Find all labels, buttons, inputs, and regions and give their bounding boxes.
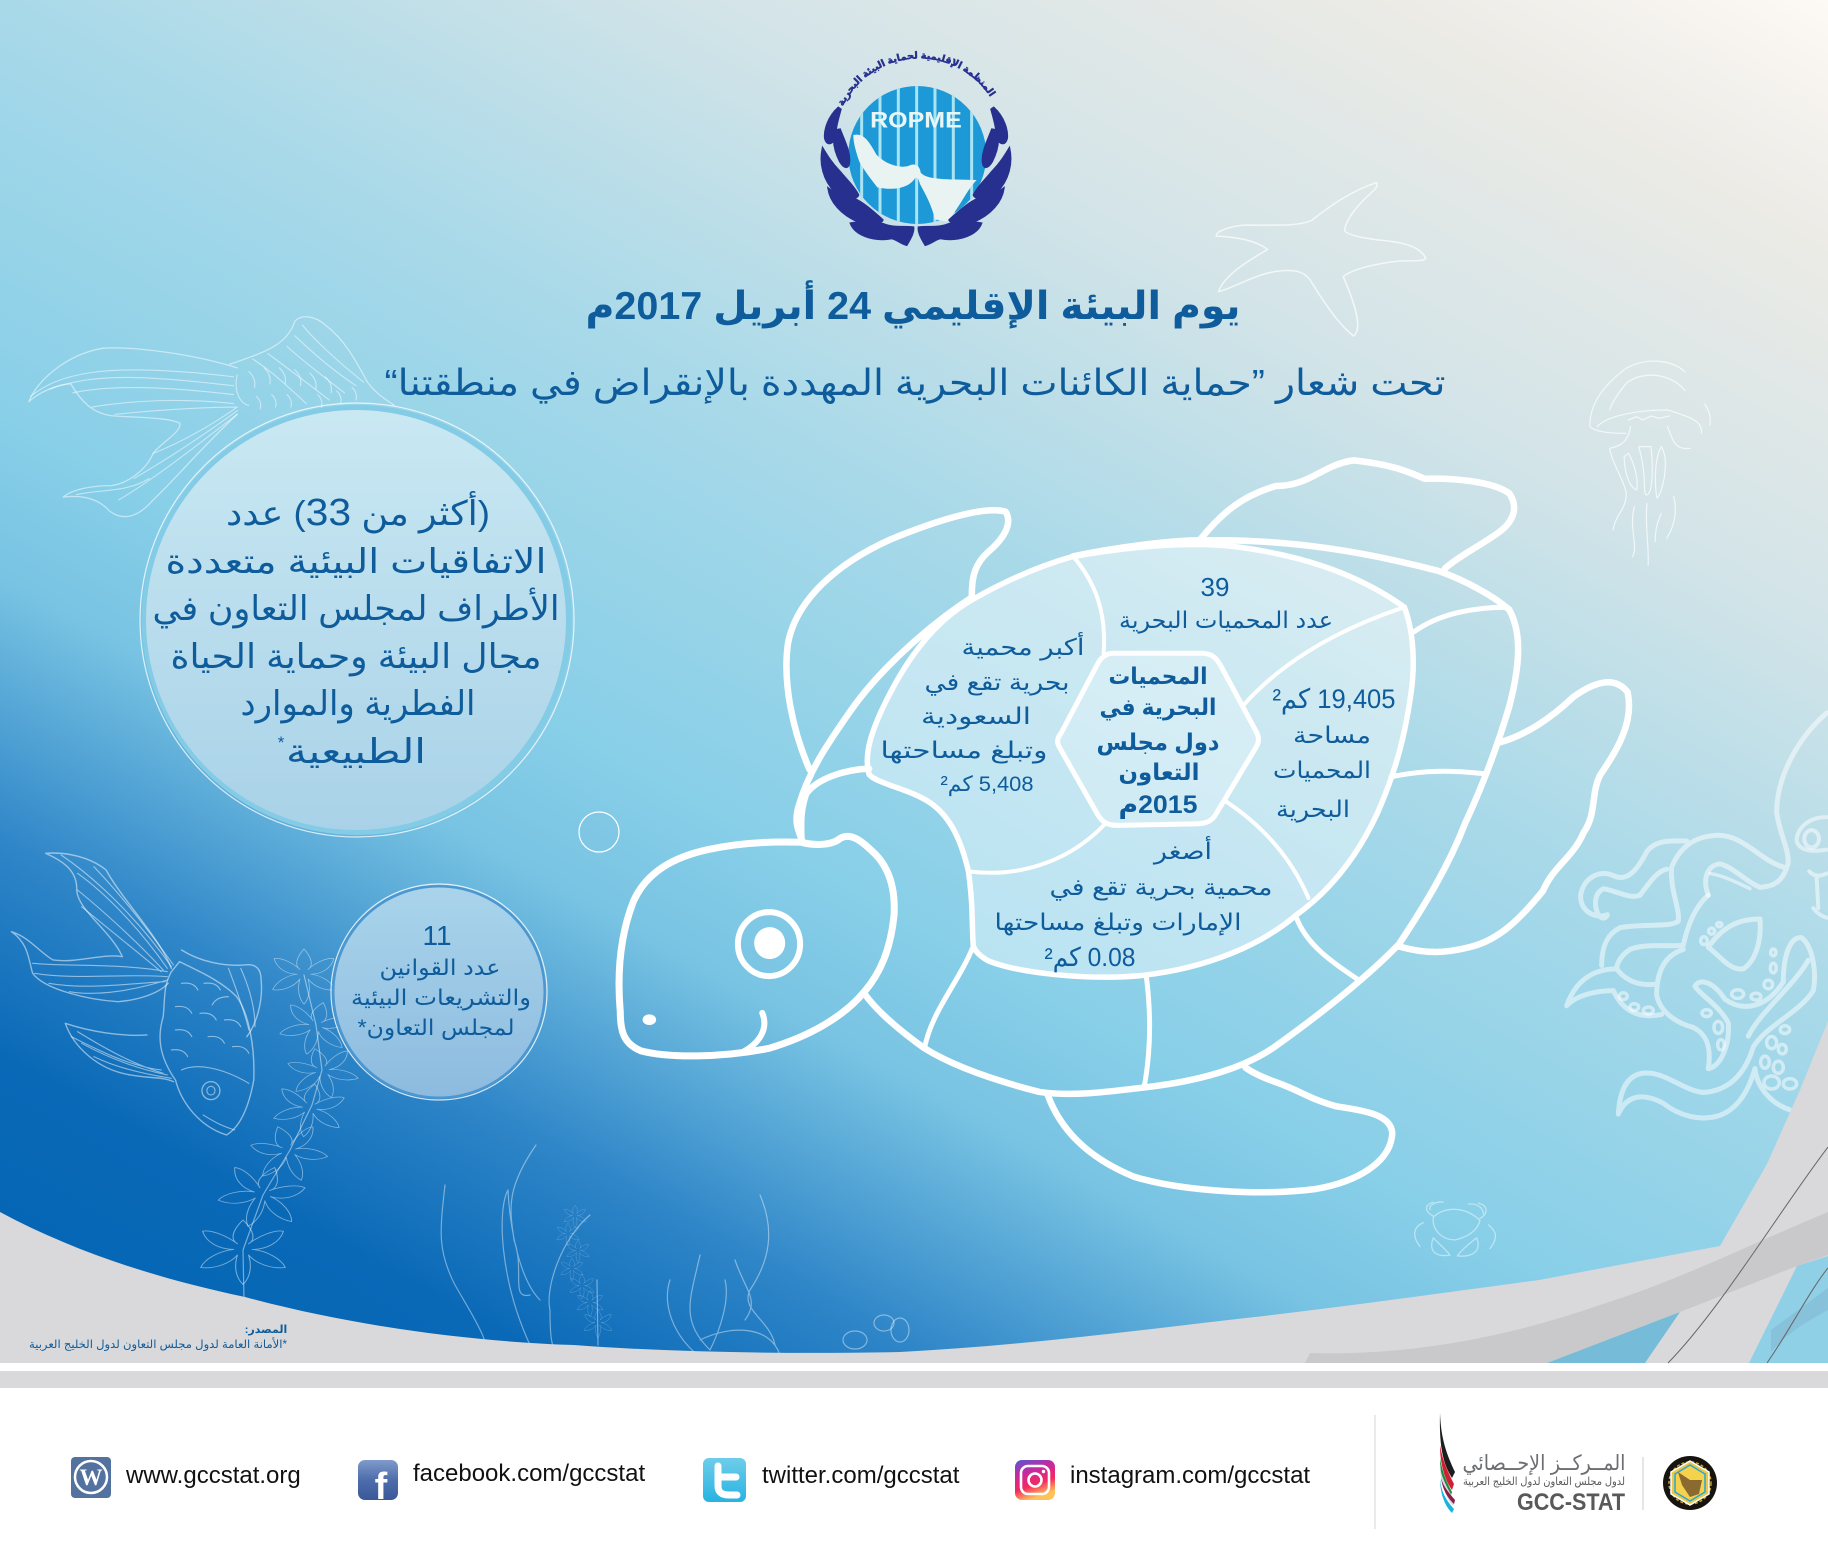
turtle: front flipper bbox=[786, 510, 1008, 770]
source note: *الأمانة العامة لدول مجلس التعاون لدول الخليج العربية bbox=[29, 1337, 288, 1352]
decoration: bottom-left fish bbox=[11, 853, 262, 1135]
turtle text: hexagon heading: 2015م bbox=[1118, 791, 1198, 819]
icon: wordpress bbox=[71, 1457, 111, 1498]
social: instagram: instagram.com/gccstat bbox=[1070, 1462, 1310, 1489]
logo ribbons bbox=[1440, 1413, 1455, 1513]
logo: GCC-STAT: لدول مجلس التعاون لدول الخليج العربية bbox=[1463, 1476, 1625, 1488]
turtle: smile bbox=[743, 1013, 764, 1052]
social: facebook bbox=[358, 1460, 645, 1508]
source note: المصدر: bbox=[245, 1324, 287, 1336]
turtle text: largest reserve bbox=[880, 632, 1084, 797]
turtle text: reserve area bbox=[1272, 684, 1396, 823]
panel: large circle, agreements: * bbox=[278, 733, 285, 752]
social: twitter: twitter.com/gccstat bbox=[762, 1462, 960, 1489]
icon: facebook: f bbox=[375, 1466, 388, 1508]
logo: ROPME emblem: ROPME bbox=[870, 107, 962, 132]
panel: large circle, agreements: الأطراف لمجلس التعاون في bbox=[152, 587, 560, 629]
logo: GCC-STAT: المــركــز الإحــصائي bbox=[1462, 1452, 1626, 1475]
turtle text: hexagon heading: دول مجلس bbox=[1096, 729, 1220, 756]
panel: small circle, laws: عدد القوانين bbox=[380, 955, 500, 980]
icon: wordpress: W bbox=[80, 1465, 102, 1490]
panel: small circle, laws bbox=[331, 884, 547, 1100]
logo: GCC-STAT bbox=[1440, 1413, 1626, 1516]
turtle: shell and flippers line art bbox=[619, 460, 1629, 1192]
turtle text: largest reserve: بحرية تقع في bbox=[924, 669, 1070, 696]
turtle: shell dividers bbox=[968, 556, 1404, 898]
icon: twitter bbox=[703, 1458, 746, 1502]
decoration: bottom seaweed bbox=[441, 1145, 909, 1380]
social: website: www.gccstat.org bbox=[125, 1462, 301, 1489]
title: يوم البيئة الإقليمي 24 أبريل 2017م bbox=[586, 280, 1240, 329]
turtle text: largest reserve: 5,408 كم² bbox=[940, 773, 1034, 797]
decoration: crab bbox=[1415, 1202, 1495, 1256]
turtle text: smallest reserve: محمية بحرية تقع في bbox=[1050, 874, 1272, 901]
turtle text: reserve area: مساحة bbox=[1293, 722, 1371, 748]
panel: large circle, agreements: الاتفاقيات البيئية متعددة bbox=[166, 543, 546, 581]
subtitle: تحت شعار ”حماية الكائنات البحرية المهددة بالإنقراض في منطقتنا“ bbox=[384, 362, 1446, 404]
social: twitter bbox=[703, 1458, 960, 1502]
social: instagram bbox=[1015, 1460, 1310, 1500]
icon: instagram bbox=[1015, 1460, 1055, 1500]
decoration: bubble bbox=[579, 812, 619, 852]
turtle text: number of reserves: عدد المحميات البحرية bbox=[1119, 607, 1333, 634]
turtle text: reserve area: المحميات bbox=[1273, 757, 1371, 783]
turtle text: largest reserve: وتبلغ مساحتها bbox=[880, 737, 1048, 764]
decoration: top-left fish bbox=[29, 317, 394, 517]
decoration: plant stem with leaves bbox=[201, 949, 363, 1300]
panel: large circle, agreements: (أكثر من 33) عدد bbox=[226, 491, 490, 534]
turtle text: smallest reserve: أصغر bbox=[1153, 836, 1212, 865]
panel: small circle, laws: لمجلس التعاون* bbox=[358, 1015, 514, 1041]
turtle text: largest reserve: السعودية bbox=[921, 703, 1031, 730]
turtle text: smallest reserve bbox=[994, 836, 1272, 973]
turtle: head bbox=[619, 836, 894, 1056]
turtle: neck bbox=[801, 769, 869, 842]
turtle text: hexagon heading bbox=[1096, 663, 1220, 819]
icon: facebook bbox=[358, 1460, 398, 1508]
turtle text: hexagon heading: التعاون bbox=[1118, 759, 1200, 786]
decoration: octopus bbox=[1567, 713, 1827, 1118]
turtle text: hexagon heading: البحرية في bbox=[1100, 694, 1216, 721]
decoration: jellyfish bbox=[1590, 361, 1710, 565]
logo: GCC emblem bbox=[1663, 1456, 1717, 1510]
panel: large circle, agreements: مجال البيئة وحماية الحياة bbox=[170, 638, 542, 677]
footer band bbox=[0, 1371, 1828, 1388]
turtle: lower flipper bbox=[1048, 1068, 1392, 1192]
social: website bbox=[71, 1457, 301, 1498]
panel: grey swoosh footer of hero bbox=[0, 1021, 1828, 1363]
social: facebook: facebook.com/gccstat bbox=[413, 1460, 645, 1487]
panel: small circle, laws: 11 bbox=[422, 920, 452, 951]
turtle: upper rear flipper bbox=[1200, 460, 1514, 568]
turtle illustration bbox=[0, 460, 1828, 1529]
turtle text: largest reserve: أكبر محمية bbox=[962, 632, 1084, 661]
turtle: eye ring bbox=[738, 912, 800, 976]
panel: small circle, laws: والتشريعات البيئية bbox=[351, 985, 531, 1010]
turtle: eye pupil bbox=[754, 927, 785, 959]
turtle text: smallest reserve: الإمارات وتبلغ مساحتها bbox=[994, 909, 1242, 936]
logo: GCC-STAT: GCC-STAT bbox=[1517, 1489, 1625, 1516]
panel: large circle, agreements: الفطرية والموارد bbox=[240, 685, 476, 724]
turtle text: hexagon heading: المحميات bbox=[1108, 663, 1208, 689]
turtle text: number of reserves bbox=[1119, 572, 1333, 634]
turtle text: reserve area: 19,405 كم² bbox=[1272, 684, 1396, 715]
logo: ROPME emblem: المنظمة الإقليمية لحماية البيئة البحرية bbox=[839, 50, 996, 106]
panel: large circle, agreements: الطبيعية bbox=[286, 733, 426, 771]
turtle text: reserve area: البحرية bbox=[1276, 796, 1350, 823]
turtle text: smallest reserve: 0.08 كم² bbox=[1044, 942, 1136, 973]
logo: ROPME emblem bbox=[820, 50, 1012, 246]
decoration: starfish bbox=[1216, 183, 1426, 336]
panel: large circle, agreements bbox=[140, 403, 574, 837]
turtle: right flipper bbox=[1399, 682, 1629, 952]
source note bbox=[29, 1324, 288, 1352]
turtle text: number of reserves: 39 bbox=[1201, 572, 1229, 602]
turtle: nostril bbox=[643, 1014, 656, 1025]
